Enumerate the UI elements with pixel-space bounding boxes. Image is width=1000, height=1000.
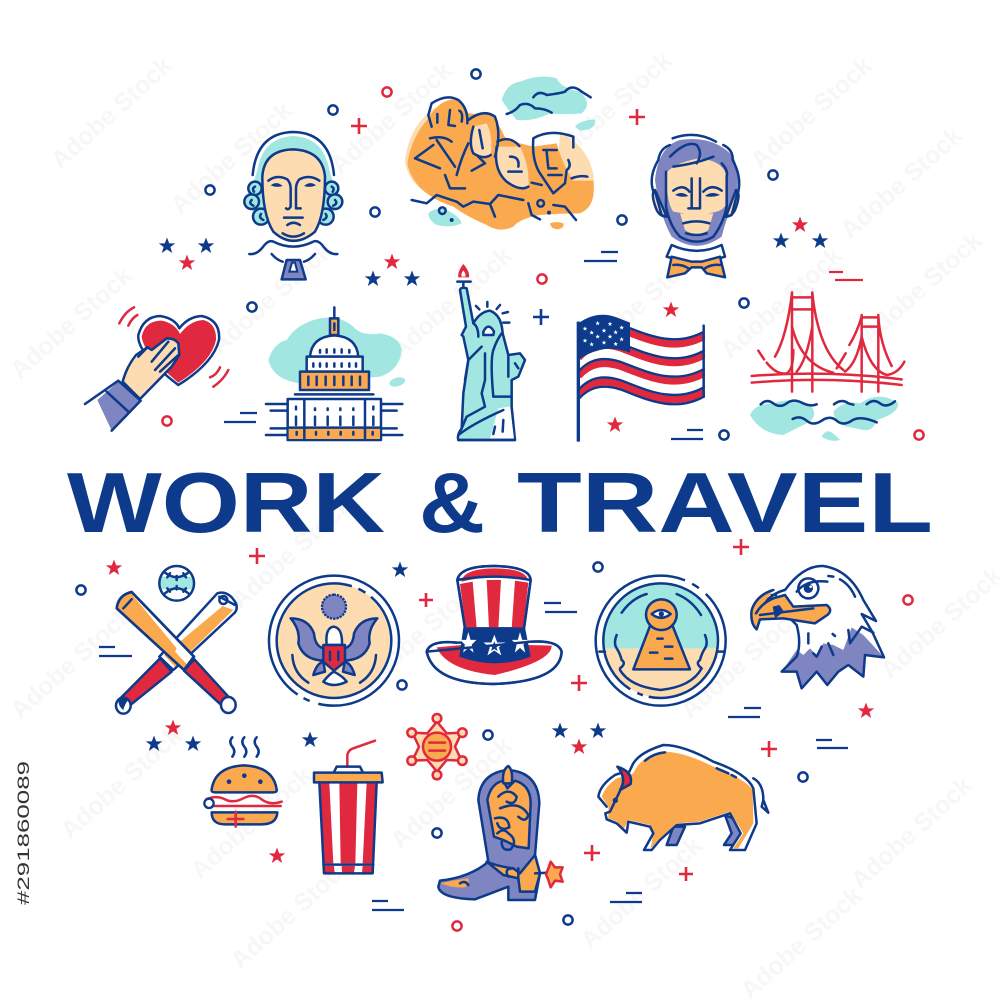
watermark pattern: Adobe Stock (225, 851, 358, 974)
watermark pattern: Adobe Stock (205, 236, 338, 359)
watermark pattern: Adobe Stock (165, 96, 298, 219)
speed dashes (99, 252, 863, 910)
star clusters (106, 216, 874, 863)
plus signs (249, 109, 777, 881)
icon: Great Seal eagle (269, 576, 399, 706)
watermark pattern: Adobe Stock (675, 601, 808, 724)
watermark pattern: Adobe Stock (715, 241, 848, 364)
navy ring dots (76, 69, 808, 925)
watermark pattern: Adobe Stock (385, 731, 518, 854)
icon: Lincoln portrait (652, 135, 739, 277)
icon: sheriff badge (407, 714, 467, 779)
watermark pattern: Adobe Stock (745, 51, 878, 174)
watermark pattern: Adobe Stock (5, 601, 138, 724)
icon: burger (204, 737, 282, 827)
icon: bison (598, 745, 768, 850)
icon: hand on heart (85, 307, 228, 431)
icon: bald eagle head (751, 566, 884, 688)
icon: Capitol building (266, 307, 406, 440)
icon: Statue of Liberty (457, 264, 525, 440)
watermark pattern: Adobe Stock (225, 491, 358, 614)
watermark pattern: Adobe Stock (355, 571, 488, 694)
icon: Mount Rushmore (405, 76, 595, 230)
icon: cowboy boot (438, 766, 563, 900)
watermark pattern: Adobe Stock (55, 721, 188, 844)
title: WORK (67, 456, 385, 551)
title: TRAVEL (517, 456, 933, 551)
red ring dots (162, 87, 924, 931)
watermark pattern: Adobe Stock (385, 241, 518, 364)
icon: Golden Gate bridge (750, 292, 904, 441)
icon: pyramid seal (596, 576, 726, 706)
icon: American flag (578, 315, 705, 442)
watermark pattern: Adobe Stock (845, 771, 978, 894)
icon: crossed baseball bats (116, 566, 237, 714)
watermark pattern: Adobe Stock (855, 226, 988, 349)
watermark pattern: Adobe Stock (325, 56, 458, 179)
title (67, 456, 933, 551)
watermark pattern: Adobe Stock (575, 241, 708, 364)
stock image id: #291860089 (14, 761, 33, 905)
icon: Uncle Sam hat (427, 566, 562, 684)
watermark pattern: Adobe Stock (45, 51, 178, 174)
watermark pattern: Adobe Stock (835, 121, 968, 244)
watermark pattern: Adobe Stock (5, 261, 138, 384)
watermark pattern: Adobe Stock (575, 831, 708, 954)
icon: Washington portrait (244, 132, 342, 279)
watermark pattern: Adobe Stock (545, 46, 678, 169)
title: & (419, 456, 485, 551)
watermark pattern: Adobe Stock (185, 761, 318, 884)
icon: soda cup (314, 741, 383, 873)
